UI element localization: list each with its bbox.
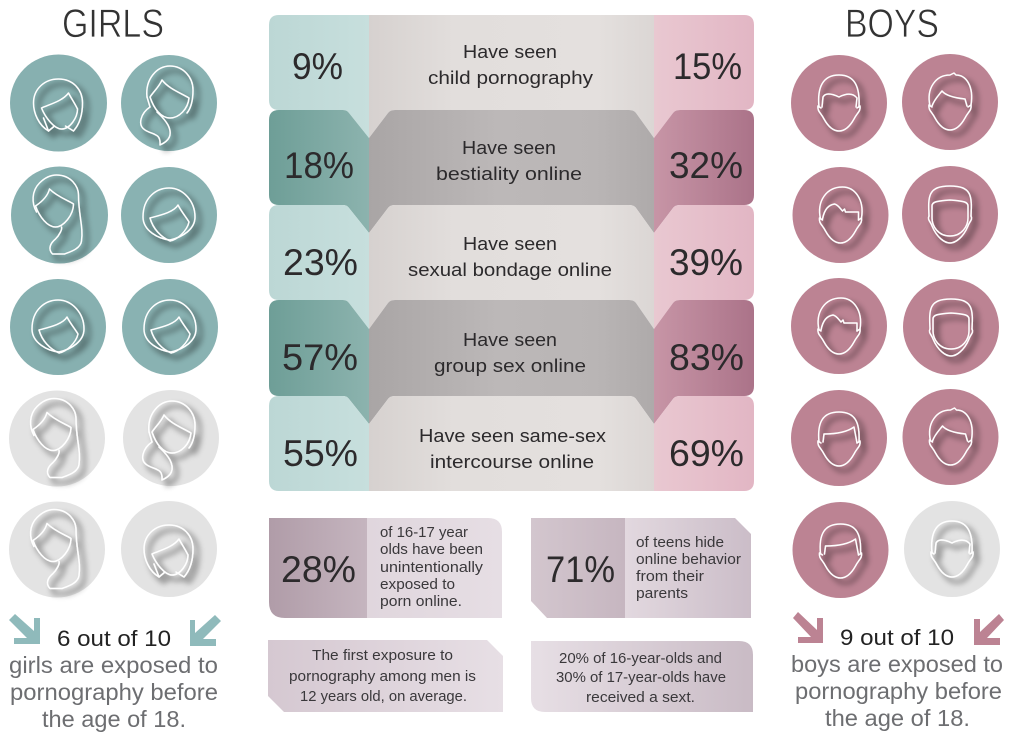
- callout: 28 percent unintentionally exposed: unintentionally: [380, 560, 484, 576]
- callout: 71 percent hide behavior: [531, 518, 751, 618]
- row: group sex: 57%: [282, 337, 358, 378]
- row: child pornography: 15%: [673, 46, 742, 87]
- callout: 28 percent unintentionally exposed: olds have been: [380, 542, 483, 558]
- icon: boy 7: [791, 390, 887, 486]
- stat text: girls are exposed to: [9, 652, 218, 678]
- row: same-sex intercourse: 69%: [669, 433, 744, 474]
- row: child pornography: 9%: [292, 46, 343, 87]
- row: group sex: group sex online: [434, 355, 586, 376]
- callout: first exposure age: The first exposure to: [312, 648, 453, 664]
- callout: 28 percent unintentionally exposed: porn online.: [380, 594, 462, 610]
- panel: comparison table: [269, 15, 754, 491]
- row: same-sex intercourse: intercourse online: [430, 451, 594, 472]
- arrow: left, pointing down-right: [9, 614, 40, 644]
- heading: girls: GIRLS: [62, 2, 164, 46]
- callout: 28 percent unintentionally exposed: exposed to: [380, 577, 455, 593]
- callout: sexting: received a sext.: [586, 690, 695, 706]
- heading: boys: BOYS: [845, 2, 939, 46]
- row: same-sex intercourse: 55%: [283, 433, 358, 474]
- arrow: right, pointing down-left: [190, 615, 221, 646]
- row: same-sex intercourse: [269, 396, 754, 491]
- row: sexual bondage: 23%: [283, 242, 358, 283]
- icon: girl 9 unexposed: [9, 502, 105, 598]
- stat text: the age of 18.: [42, 706, 186, 732]
- stat text: [791, 625, 1003, 731]
- icon: girl 7 unexposed: [9, 390, 105, 486]
- stat text: 6 out of 10: [57, 626, 171, 651]
- row: child pornography: Have seen: [463, 41, 557, 62]
- icon: boy 9: [792, 502, 888, 598]
- icon: boy 10 unexposed: [904, 501, 1000, 597]
- row: bestiality: [269, 110, 754, 233]
- row: bestiality: Have seen: [462, 137, 556, 158]
- icon: boy 6: [903, 279, 999, 375]
- callout: 71 percent hide behavior: from their: [636, 569, 704, 585]
- icon: girl 8 unexposed: [123, 390, 219, 486]
- callout: 71 percent hide behavior: 71%: [546, 549, 615, 590]
- row: child pornography: child pornography: [428, 67, 594, 88]
- callout: 71 percent hide behavior: parents: [636, 586, 688, 602]
- stat text: 9 out of 10: [840, 625, 954, 650]
- icon: boy 2: [902, 54, 998, 150]
- row: same-sex intercourse: Have seen same-sex: [419, 425, 607, 446]
- row: group sex: Have seen: [463, 329, 557, 350]
- stat text: pornography before: [795, 678, 1002, 704]
- callout: 71 percent hide behavior: online behavior: [636, 552, 741, 568]
- row: child pornography: [269, 15, 754, 138]
- callout: first exposure age: [268, 640, 503, 712]
- arrow: left, pointing down-right: [793, 612, 823, 643]
- row: sexual bondage: Have seen: [463, 233, 557, 254]
- panel: boys icon grid: [791, 54, 1000, 598]
- row: bestiality: bestiality online: [436, 163, 582, 184]
- callout: 28 percent unintentionally exposed: of 16-17 year: [380, 525, 468, 541]
- stat text: boys are exposed to: [791, 651, 1003, 677]
- callout: sexting: [531, 641, 753, 712]
- arrow: right, pointing down-left: [974, 614, 1004, 645]
- callout: first exposure age: 12 years old, on average.: [300, 689, 467, 705]
- icon: girl 2: [121, 55, 217, 151]
- panel: girls icon grid: [9, 54, 219, 598]
- panel: girls statistic: [9, 614, 221, 732]
- icon: boy 1: [791, 55, 887, 151]
- icon: girl 3: [11, 166, 108, 264]
- icon: boy 3: [792, 167, 888, 263]
- icon: girl 6: [122, 279, 218, 375]
- stat text: the age of 18.: [825, 705, 970, 731]
- icon: girl 10 unexposed: [121, 501, 217, 597]
- callout: sexting: 20% of 16-year-olds and: [559, 651, 722, 667]
- icon: boy 5: [791, 278, 887, 374]
- row: sexual bondage: 39%: [669, 242, 743, 283]
- row: bestiality: 18%: [284, 145, 354, 186]
- stat text: pornography before: [10, 679, 218, 705]
- icon: girl 5: [10, 279, 106, 375]
- icon: boy 8: [902, 389, 998, 485]
- callout: sexting: 30% of 17-year-olds have: [556, 670, 726, 686]
- callout: 28 percent unintentionally exposed: 28%: [281, 549, 356, 590]
- icon: girl 1: [10, 54, 107, 152]
- row: sexual bondage: [269, 205, 754, 329]
- row: group sex: [269, 300, 754, 424]
- row: sexual bondage: sexual bondage online: [408, 259, 612, 280]
- callout: 28 percent unintentionally exposed: [269, 518, 502, 618]
- panel: boys statistic: [791, 612, 1004, 731]
- row: group sex: 83%: [669, 337, 744, 378]
- row: bestiality: 32%: [669, 145, 743, 186]
- icon: girl 4: [121, 167, 217, 263]
- callout: 71 percent hide behavior: of teens hide: [636, 535, 724, 551]
- callout: first exposure age: pornography among men is: [289, 669, 476, 685]
- stat text: [9, 626, 218, 732]
- icon: boy 4: [902, 166, 998, 262]
